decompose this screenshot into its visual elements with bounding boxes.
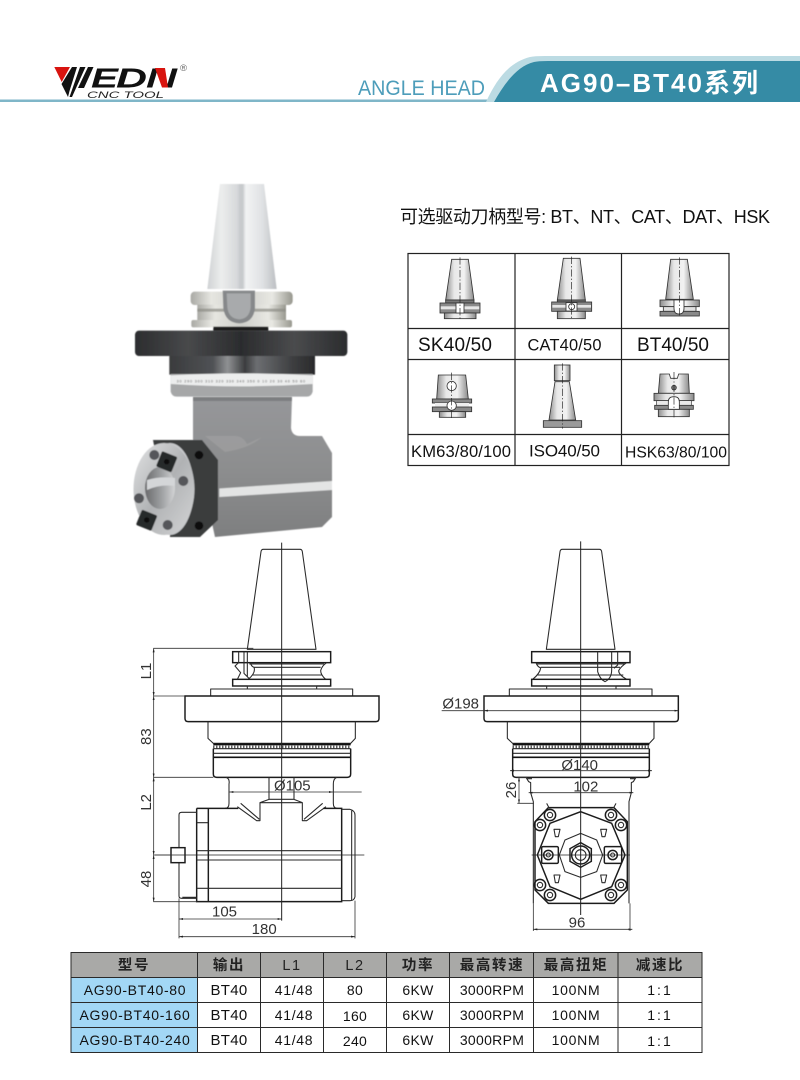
label: BT40/50: BT40/50 bbox=[637, 335, 709, 356]
table header row: L1 bbox=[282, 958, 302, 974]
housing outline bbox=[171, 777, 355, 902]
table header row: 最高扭矩 bbox=[544, 956, 608, 974]
label: SK40/50: SK40/50 bbox=[418, 335, 492, 356]
drive key top bbox=[156, 451, 177, 473]
dimension: 105: 105 bbox=[212, 904, 237, 921]
round clamping ring bbox=[134, 443, 194, 535]
dimension: 102: 102 bbox=[573, 778, 598, 795]
front plate bbox=[153, 440, 218, 537]
product photo: angle head bbox=[134, 184, 347, 537]
logo wordmark: N bbox=[146, 62, 178, 94]
upper section of photo bbox=[135, 184, 347, 397]
icon: HSK holder bbox=[654, 372, 694, 419]
table row: AG90-BT40-80 bbox=[84, 982, 673, 999]
header tab bbox=[494, 61, 800, 102]
center lines bbox=[155, 543, 364, 921]
dimension: 105 bbox=[179, 898, 355, 938]
housing body bbox=[193, 397, 332, 537]
neck outline bbox=[526, 777, 636, 903]
dimension: L1, 83, L2, 48: L1 bbox=[138, 663, 155, 679]
dimension: diameter 105 bbox=[229, 778, 362, 795]
shank and collar outline bbox=[532, 549, 630, 689]
table row: AG90-BT40-80: BT40 bbox=[210, 982, 248, 999]
table row: AG90-BT40-80: 80 bbox=[347, 982, 363, 998]
table row: AG90-BT40-240: 240 bbox=[343, 1033, 367, 1049]
graduated scale ring bbox=[171, 373, 313, 386]
dimension: L1, 83, L2, 48: L2 bbox=[138, 794, 155, 811]
table row: AG90-BT40-80: 41/48 bbox=[275, 982, 313, 998]
table row: AG90-BT40-80: 6KW bbox=[402, 982, 434, 998]
table row: AG90-BT40-160: 3000RPM bbox=[460, 1007, 524, 1023]
label: ISO40/50: ISO40/50 bbox=[529, 442, 600, 460]
dimension: 96: 96 bbox=[569, 914, 585, 931]
dimension: L1, 83, L2, 48 bbox=[138, 648, 253, 902]
table row: AG90-BT40-160: 1:1 bbox=[647, 1007, 673, 1023]
logo mark bbox=[54, 67, 94, 97]
dimension: L1, 83, L2, 48: 48 bbox=[138, 871, 155, 887]
table row: AG90-BT40-240: 100NM bbox=[552, 1032, 600, 1048]
side view technical drawing bbox=[138, 543, 379, 938]
table row: AG90-BT40-240: 3000RPM bbox=[460, 1032, 524, 1048]
center lines bbox=[532, 541, 630, 915]
icon: BT holder bbox=[660, 257, 699, 317]
table row: AG90-BT40-240: 6KW bbox=[402, 1032, 434, 1048]
table header row: 型号 bbox=[118, 957, 150, 974]
tool collar bbox=[191, 291, 293, 331]
drive key bottom bbox=[136, 510, 157, 531]
table header row: 减速比 bbox=[636, 957, 684, 974]
dimension: diameter 198: Ø198 bbox=[442, 695, 479, 712]
model column highlight bbox=[71, 978, 197, 1053]
black flange bbox=[135, 331, 347, 356]
plate bolts bbox=[195, 451, 203, 530]
icon: SK holder bbox=[440, 257, 480, 321]
table row: AG90-BT40-160: 100NM bbox=[552, 1007, 600, 1023]
table row: AG90-BT40-240 bbox=[79, 1032, 673, 1049]
table row: AG90-BT40-80: 3000RPM bbox=[460, 982, 524, 998]
table row: AG90-BT40-160: AG90-BT40-160 bbox=[79, 1007, 191, 1023]
shank and collar outline bbox=[233, 549, 331, 689]
logo wordmark: E bbox=[91, 62, 120, 94]
table header row: 功率 bbox=[402, 956, 434, 974]
dimension: L1, 83, L2, 48: 83 bbox=[138, 728, 155, 745]
table header row: L2 bbox=[345, 958, 365, 974]
label: HSK63/80/100: HSK63/80/100 bbox=[625, 444, 727, 462]
table header row: 最高转速 bbox=[460, 956, 524, 974]
drive keys bbox=[542, 829, 622, 883]
logo wordmark bbox=[91, 62, 178, 94]
header band bbox=[0, 56, 800, 102]
table row: AG90-BT40-160: BT40 bbox=[210, 1007, 248, 1024]
flange outline bbox=[484, 689, 678, 777]
icon: KM holder bbox=[432, 373, 472, 419]
graduated scale ring: 30 290 300 310 320 330 340 350 0 10 20 30 40 50 60 bbox=[177, 380, 305, 384]
logo wordmark: D bbox=[116, 62, 147, 94]
table row: AG90-BT40-240: 1:1 bbox=[647, 1033, 673, 1049]
dimension: 180: 180 bbox=[252, 921, 277, 938]
grey ring bbox=[171, 374, 313, 397]
table row: AG90-BT40-80: AG90-BT40-80 bbox=[84, 982, 186, 998]
table row: AG90-BT40-160: 6KW bbox=[402, 1007, 434, 1023]
table header row bbox=[71, 952, 702, 978]
taper shank bbox=[207, 184, 277, 289]
table row: AG90-BT40-160: 160 bbox=[343, 1008, 367, 1024]
octagonal end plate bbox=[535, 803, 627, 903]
dimension: 26 bbox=[503, 777, 534, 803]
end plate bolts bbox=[534, 809, 627, 901]
dimension: 102 bbox=[529, 778, 633, 795]
logo tagline: CNC TOOL bbox=[87, 90, 164, 100]
icon: ISO holder bbox=[543, 363, 582, 429]
table row: AG90-BT40-80: 100NM bbox=[552, 982, 600, 998]
optional holder heading: 可选驱动刀柄型号: BT、NT、CAT、DAT、HSK bbox=[400, 207, 770, 227]
dimension: 96 bbox=[533, 903, 632, 931]
table row: AG90-BT40-80: 1:1 bbox=[647, 982, 673, 998]
table header row: 输出 bbox=[213, 956, 245, 974]
table row: AG90-BT40-240: BT40 bbox=[210, 1032, 248, 1049]
front view technical drawing bbox=[442, 541, 678, 931]
header tab outline bbox=[486, 56, 800, 102]
table row: AG90-BT40-160: 41/48 bbox=[275, 1007, 313, 1023]
table row: AG90-BT40-240: AG90-BT40-240 bbox=[79, 1032, 191, 1048]
label: KM63/80/100: KM63/80/100 bbox=[411, 442, 511, 461]
dark ring bbox=[169, 356, 315, 375]
table row: AG90-BT40-160 bbox=[79, 1007, 673, 1024]
flange outline bbox=[185, 689, 379, 777]
label: CAT40/50: CAT40/50 bbox=[528, 336, 602, 354]
dimension: diameter 105: Ø105 bbox=[274, 778, 311, 795]
series title: AG90–BT40系列 bbox=[540, 68, 758, 98]
dimension: 26: 26 bbox=[503, 782, 520, 798]
specification table bbox=[71, 952, 702, 1053]
angle head label: ANGLE HEAD bbox=[358, 77, 485, 100]
holder type grid bbox=[408, 254, 729, 466]
logo bbox=[54, 62, 187, 100]
table row: AG90-BT40-240: 41/48 bbox=[275, 1032, 313, 1048]
registered mark: ® bbox=[180, 63, 187, 74]
icon: CAT holder bbox=[552, 257, 592, 320]
dimension: diameter 140: Ø140 bbox=[561, 757, 598, 774]
